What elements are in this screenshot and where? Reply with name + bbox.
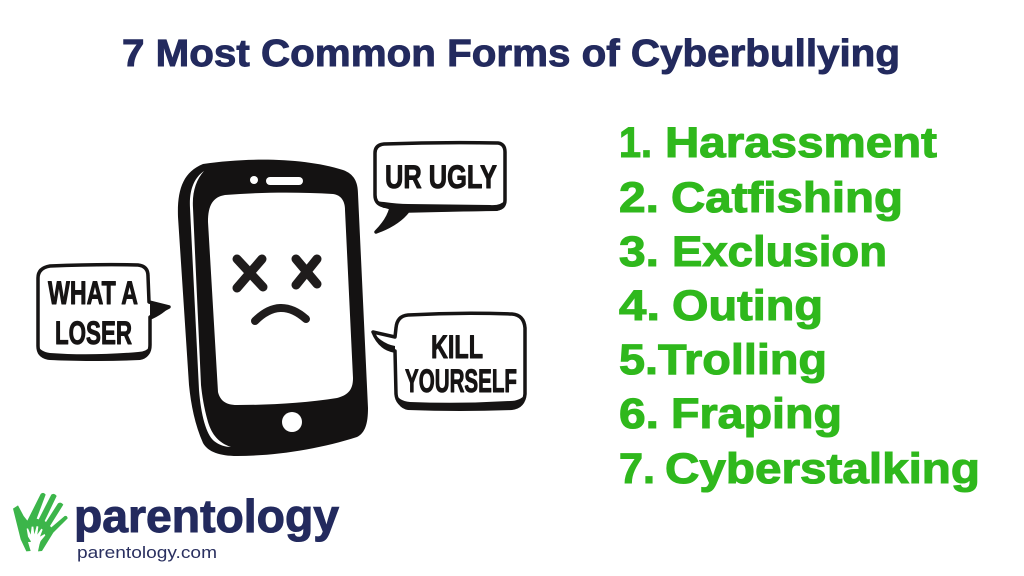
logo wordmark: parentology xyxy=(74,490,339,542)
sad mouth xyxy=(255,308,306,321)
list of forms: Cyberstalking xyxy=(665,445,980,493)
phone screen xyxy=(208,193,353,405)
speech bubble: what a loser: WHAT A xyxy=(48,275,138,311)
icon: sad phone xyxy=(178,160,368,456)
list of forms: 3. xyxy=(619,228,659,276)
phone home button xyxy=(282,412,302,432)
right x eye xyxy=(296,259,317,285)
speech bubble: ur ugly: UR UGLY xyxy=(385,159,497,195)
phone speaker and camera xyxy=(250,176,303,185)
phone body xyxy=(178,160,368,456)
list of forms: 6. xyxy=(619,390,659,438)
phone edge highlight xyxy=(190,171,231,447)
speech bubble: what a loser: LOSER xyxy=(55,315,132,351)
icon: child hand xyxy=(27,526,45,548)
icon: green hand xyxy=(13,493,68,551)
list of forms: 5.Trolling xyxy=(619,336,827,384)
title: 7 Most Common Forms of Cyberbullying xyxy=(122,33,900,75)
speech bubble: kill yourself: KILL xyxy=(431,329,483,365)
logo url: parentology.com xyxy=(77,543,217,562)
speech bubble: ur ugly xyxy=(374,143,506,232)
list of forms: Harassment xyxy=(665,119,937,167)
list of forms: 2. xyxy=(619,174,659,222)
list of forms: 1. xyxy=(619,119,652,167)
list of forms: Outing xyxy=(672,282,823,330)
speech bubble: kill yourself xyxy=(372,313,526,411)
speech bubble: kill yourself: YOURSELF xyxy=(405,363,517,399)
list of forms: Catfishing xyxy=(671,174,903,222)
speech bubble: what a loser xyxy=(37,265,170,361)
list of forms: 7. xyxy=(619,445,655,493)
list of forms: Fraping xyxy=(671,390,842,438)
left x eye xyxy=(237,259,263,288)
list of forms: Exclusion xyxy=(672,228,887,276)
logo xyxy=(13,490,339,562)
list of forms: 4. xyxy=(619,282,660,330)
list of forms xyxy=(619,119,980,493)
